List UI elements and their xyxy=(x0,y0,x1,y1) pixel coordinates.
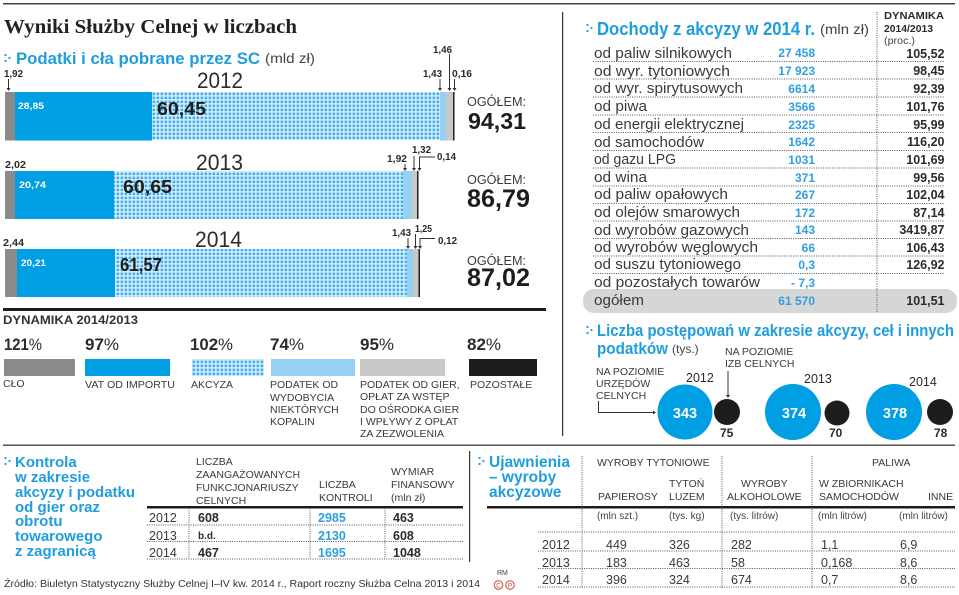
legend item: other: 82% xyxy=(467,335,501,354)
bar chart 2013: 0,14 xyxy=(437,151,456,163)
table rows: 2985 xyxy=(318,511,346,525)
table rows: 463 xyxy=(669,556,690,570)
bar chart 2013: 1,92 xyxy=(387,153,407,165)
table headers: PAPIEROSY xyxy=(598,491,658,503)
table rows: od suszu tytoniowego xyxy=(594,256,741,273)
circles 2014 xyxy=(866,375,953,440)
table rows: od wyrobów gazowych xyxy=(594,222,749,239)
table rows: od wina xyxy=(594,169,648,186)
units: (mln litrów) xyxy=(899,511,948,522)
callout: customs offices xyxy=(596,366,664,414)
table rows: 2012 xyxy=(149,511,177,525)
bar chart 2013: 60,65 xyxy=(123,177,172,197)
table rows: od paliw opałowych xyxy=(594,186,728,203)
bar chart 2014: 0,12 xyxy=(438,235,457,247)
legend item: mineral extraction tax: NIEKTÓRYCH xyxy=(270,403,339,416)
bar chart 2014: 2,44 xyxy=(3,237,24,249)
bar chart 2012: 1,46 xyxy=(433,44,452,56)
total row: ogółem xyxy=(594,292,644,309)
legend item: duty: CŁO xyxy=(3,378,25,390)
bar chart 2013: 20,74 xyxy=(19,180,47,191)
legend item: excise: AKCYZA xyxy=(191,379,233,391)
table rows: 102,04 xyxy=(906,188,945,202)
bar chart 2013: 1,32 xyxy=(412,144,431,156)
total 2013 xyxy=(467,172,530,213)
bar chart 2012: 0,16 xyxy=(452,68,472,80)
table rows: 66 xyxy=(802,241,815,255)
total 2012: 94,31 xyxy=(468,108,526,134)
copyright mark: RM xyxy=(497,570,508,577)
heading: seizures: – wyroby xyxy=(489,469,557,486)
total 2014: 87,02 xyxy=(467,264,530,292)
legend item: mineral extraction tax: WYDOBYCIA xyxy=(270,392,334,404)
table rows: 116,20 xyxy=(907,135,945,149)
table rows: 3419,87 xyxy=(899,223,945,237)
table headers: KONTROLI xyxy=(319,492,373,504)
table rows: 2130 xyxy=(318,529,346,543)
units xyxy=(597,511,948,522)
panel: seizures xyxy=(478,454,955,588)
heading: taxes and duties: (mld zł) xyxy=(265,51,315,66)
bar chart 2014: 61,57 xyxy=(120,255,162,275)
callout: customs offices: CELNYCH xyxy=(596,390,646,402)
heading: seizures: akcyzowe xyxy=(489,484,562,501)
source note: Źródło: Biuletyn Statystyczny Służby Celnej I–IV kw. 2014 r., Raport roczny Służba Celna 2013 i 2014 xyxy=(4,577,480,590)
table headers: ALKOHOLOWE xyxy=(727,491,802,503)
legend item: duty xyxy=(3,335,75,390)
units: (tys. kg) xyxy=(669,511,705,522)
bar chart 2012: 60,45 xyxy=(157,99,206,119)
column header: dynamics xyxy=(884,10,944,47)
table rows xyxy=(594,45,945,291)
legend item: mineral extraction tax: KOPALIN xyxy=(270,416,315,428)
table rows: 0,3 xyxy=(798,258,815,272)
table headers: ZAANGAŻOWANYCH xyxy=(196,468,300,481)
table rows: od wyr. tytoniowych xyxy=(594,63,730,80)
heading: taxes and duties: Podatki i cła pobrane przez SC xyxy=(16,50,260,68)
table rows: 674 xyxy=(731,573,752,587)
table rows: 101,69 xyxy=(906,153,945,167)
circles 2013: 70 xyxy=(829,426,843,440)
table rows: 183 xyxy=(606,556,627,570)
bar chart 2012: 1,92 xyxy=(4,68,23,80)
table rows: 101,76 xyxy=(906,100,945,114)
circles 2014: 378 xyxy=(883,406,907,422)
table rows: 126,92 xyxy=(906,258,945,272)
total 2012 xyxy=(467,94,526,134)
table rows: 92,39 xyxy=(913,82,945,96)
legend item: gambling tax: ZA ZEZWOLENIA xyxy=(360,428,444,440)
total 2013: 86,79 xyxy=(467,185,530,213)
legend item: mineral extraction tax: 74% xyxy=(270,335,304,354)
table rows: 2013 xyxy=(149,529,177,543)
legend item: gambling tax: PODATEK OD GIER, xyxy=(360,379,460,391)
legend: dynamics 2014/2013 xyxy=(3,313,537,440)
legend item: mineral extraction tax: PODATEK OD xyxy=(270,379,338,391)
table rows: b.d. xyxy=(198,531,216,542)
heading: excise revenue: Dochody z akcyzy w 2014 r. xyxy=(597,18,815,39)
table rows: 1048 xyxy=(393,546,421,560)
table rows: 105,52 xyxy=(906,47,945,61)
total row: 101,51 xyxy=(906,294,945,308)
total 2014: OGÓŁEM: xyxy=(467,253,526,268)
legend item: gambling tax: 95% xyxy=(360,335,394,354)
circles 2014: 78 xyxy=(934,426,948,440)
table rows: 27 458 xyxy=(778,46,815,60)
column header: dynamics: DYNAMIKA xyxy=(884,10,944,22)
table headers: WYROBY xyxy=(741,478,788,490)
heading: controls: akcyzy i podatku xyxy=(15,484,135,501)
table headers: FUNKCJONARIUSZY xyxy=(196,482,299,494)
table rows: 2014 xyxy=(149,546,177,560)
legend item: gambling tax: OPŁAT ZA WSTĘP xyxy=(360,391,449,403)
circles 2013 xyxy=(765,372,850,440)
table rows: od wyrobów węglowych xyxy=(594,239,758,256)
circles 2012: 343 xyxy=(673,406,697,422)
callout: customs offices: URZĘDÓW xyxy=(596,377,650,390)
heading: controls xyxy=(4,454,135,560)
units: (mln litrów) xyxy=(818,511,867,522)
circles 2012: 2012 xyxy=(686,371,714,385)
total row: 61 570 xyxy=(778,294,815,308)
bar chart 2012: 1,43 xyxy=(423,68,442,80)
heading: controls: towarowego xyxy=(15,528,103,545)
heading: controls: z zagranicą xyxy=(15,543,97,560)
legend item: other: POZOSTAŁE xyxy=(470,379,532,391)
circles 2012: 75 xyxy=(720,426,734,440)
callout: customs chambers: NA POZIOMIE xyxy=(725,346,793,358)
table headers: CELNYCH xyxy=(196,495,246,507)
total 2013: OGÓŁEM: xyxy=(467,172,526,187)
heading: proceedings: (tys.) xyxy=(672,342,699,356)
table rows: 6,9 xyxy=(900,538,917,552)
callout: customs chambers: IZB CELNYCH xyxy=(725,358,794,370)
table rows: od wyr. spirytusowych xyxy=(594,80,743,97)
heading: seizures: Ujawnienia xyxy=(489,454,570,471)
table rows: - 7,3 xyxy=(791,276,815,290)
table rows: 608 xyxy=(393,529,414,543)
table rows: 8,6 xyxy=(900,573,917,587)
circles 2013: 2013 xyxy=(804,372,832,386)
table headers: LICZBA xyxy=(196,456,233,468)
heading: excise revenue: (mln zł) xyxy=(820,21,869,37)
table rows: 58 xyxy=(731,556,745,570)
panel: controls xyxy=(4,454,463,560)
panel: excise revenue xyxy=(583,10,957,313)
table headers xyxy=(196,456,455,507)
table rows: 172 xyxy=(795,206,815,220)
copyright mark: C xyxy=(496,582,501,590)
table rows: 17 923 xyxy=(778,64,815,78)
total 2012: OGÓŁEM: xyxy=(467,94,526,109)
table headers: W ZBIORNIKACH xyxy=(819,478,904,490)
bar chart 2014: 1,43 xyxy=(392,227,411,239)
table rows: 608 xyxy=(198,511,219,525)
legend item: import VAT: 97% xyxy=(85,335,119,354)
heading: seizures xyxy=(478,454,570,501)
table rows: 282 xyxy=(731,538,752,552)
table rows: 463 xyxy=(393,511,414,525)
bar chart 2012: 28,85 xyxy=(18,101,45,112)
table rows: od olejów smarowych xyxy=(594,204,740,221)
table rows: 267 xyxy=(795,188,815,202)
heading: controls: od gier oraz xyxy=(15,499,100,516)
table rows: od samochodów xyxy=(594,134,704,151)
table rows xyxy=(542,538,917,587)
table rows: 106,43 xyxy=(906,241,945,255)
table rows: 1,1 xyxy=(821,538,838,552)
table rows xyxy=(149,511,421,560)
bar chart 2012: 2012 xyxy=(197,68,243,93)
heading: controls: obrotu xyxy=(15,513,62,530)
heading: controls: Kontrola xyxy=(15,454,77,471)
legend item: import VAT xyxy=(85,335,175,391)
table rows: 396 xyxy=(606,573,627,587)
table rows: od pozostałych towarów xyxy=(594,274,760,291)
bar chart 2014: 20,21 xyxy=(21,258,47,269)
bar chart 2012 xyxy=(4,44,472,140)
table rows: 2013 xyxy=(542,556,570,570)
table headers: LICZBA xyxy=(319,479,356,491)
table rows: 449 xyxy=(606,538,627,552)
table headers: TYTOŃ xyxy=(669,477,704,490)
table rows: 326 xyxy=(669,538,690,552)
legend: dynamics 2014/2013: DYNAMIKA 2014/2013 xyxy=(3,313,138,327)
callout: customs chambers xyxy=(725,346,794,398)
circles 2013: 374 xyxy=(782,406,806,422)
table headers: WYROBY TYTONIOWE xyxy=(597,457,710,469)
copyright mark xyxy=(494,570,514,590)
table headers: INNE xyxy=(928,491,953,503)
legend item: import VAT: VAT OD IMPORTU xyxy=(85,379,175,391)
table headers xyxy=(597,457,953,503)
heading: controls: w zakresie xyxy=(14,469,90,486)
legend item: duty: 121% xyxy=(4,335,42,354)
heading: proceedings: podatków xyxy=(597,340,668,358)
table rows: 87,14 xyxy=(913,206,945,220)
units: (tys. litrów) xyxy=(730,511,778,522)
table rows: 371 xyxy=(795,171,815,185)
panel: number of proceedings xyxy=(586,322,954,440)
table rows: 98,45 xyxy=(913,64,945,78)
column header: dynamics: (proc.) xyxy=(884,35,915,47)
legend item: excise xyxy=(190,335,264,391)
bar chart 2013: 2013 xyxy=(196,150,243,175)
legend item: mineral extraction tax xyxy=(270,335,355,428)
table rows: 324 xyxy=(669,573,690,587)
table rows: od energii elektrycznej xyxy=(594,116,744,133)
bar chart 2014: 1,25 xyxy=(415,223,432,235)
legend item: gambling tax: I WPŁYWY Z OPŁAT xyxy=(360,416,459,428)
bar chart 2014 xyxy=(3,223,457,297)
copyright mark: P xyxy=(508,582,512,590)
legend item: excise: 102% xyxy=(190,335,233,354)
legend item: other xyxy=(467,335,537,391)
table rows: 467 xyxy=(198,546,219,560)
bar chart 2014: 2014 xyxy=(195,227,242,252)
table rows: 0,7 xyxy=(821,573,838,587)
table rows: 2012 xyxy=(542,538,570,552)
table headers: SAMOCHODÓW xyxy=(819,490,899,503)
total row background xyxy=(583,289,957,313)
table headers: WYMIAR xyxy=(391,466,435,478)
column header: dynamics: 2014/2013 xyxy=(884,23,933,35)
table headers: PALIWA xyxy=(872,457,911,469)
callout: customs offices: NA POZIOMIE xyxy=(596,366,664,378)
table rows: 1695 xyxy=(318,546,346,560)
table rows: 2325 xyxy=(788,118,815,132)
bar chart 2013: 2,02 xyxy=(5,159,26,171)
table rows: 6614 xyxy=(788,82,815,96)
legend item: gambling tax xyxy=(360,335,460,440)
table rows: od gazu LPG xyxy=(594,151,676,168)
table rows: od piwa xyxy=(594,98,648,115)
table rows: 95,99 xyxy=(913,118,945,132)
table headers: FINANSOWY xyxy=(391,479,455,491)
table rows: 1031 xyxy=(788,153,815,167)
table rows: od paliw silnikowych xyxy=(594,45,732,62)
table headers: LUZEM xyxy=(669,491,705,503)
units: (mln szt.) xyxy=(597,511,638,522)
circles 2012 xyxy=(658,371,740,440)
table headers: (mln zł) xyxy=(391,492,425,504)
table rows: 0,168 xyxy=(821,556,852,570)
table rows: 3566 xyxy=(788,100,815,114)
total row xyxy=(594,292,945,309)
table rows: 143 xyxy=(795,223,815,237)
title: Wyniki Służby Celnej w liczbach xyxy=(4,16,297,38)
table rows: 1642 xyxy=(788,135,815,149)
table rows: 2014 xyxy=(542,573,570,587)
heading: proceedings xyxy=(586,322,954,358)
circles 2014: 2014 xyxy=(909,375,937,389)
legend item: gambling tax: DO OŚRODKA GIER xyxy=(360,403,460,416)
bar chart 2013 xyxy=(5,144,456,219)
table rows: 99,56 xyxy=(913,171,945,185)
table rows: 8,6 xyxy=(900,556,917,570)
